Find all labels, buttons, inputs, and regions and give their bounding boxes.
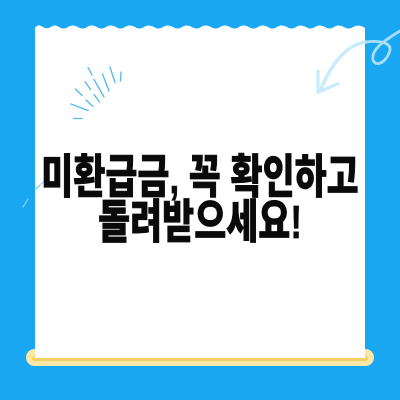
paper card with wavy top edge	[35, 25, 365, 358]
decorative dashes left of card	[23, 178, 48, 207]
title: second line: 돌려받으세요!	[98, 197, 302, 249]
scroll roller at bottom	[26, 349, 374, 366]
icon: sunburst lines	[71, 67, 121, 118]
title: first line: 미환급금, 꼭 확인하고	[41, 152, 359, 204]
arrow: curly arrow on card corner	[318, 31, 400, 92]
